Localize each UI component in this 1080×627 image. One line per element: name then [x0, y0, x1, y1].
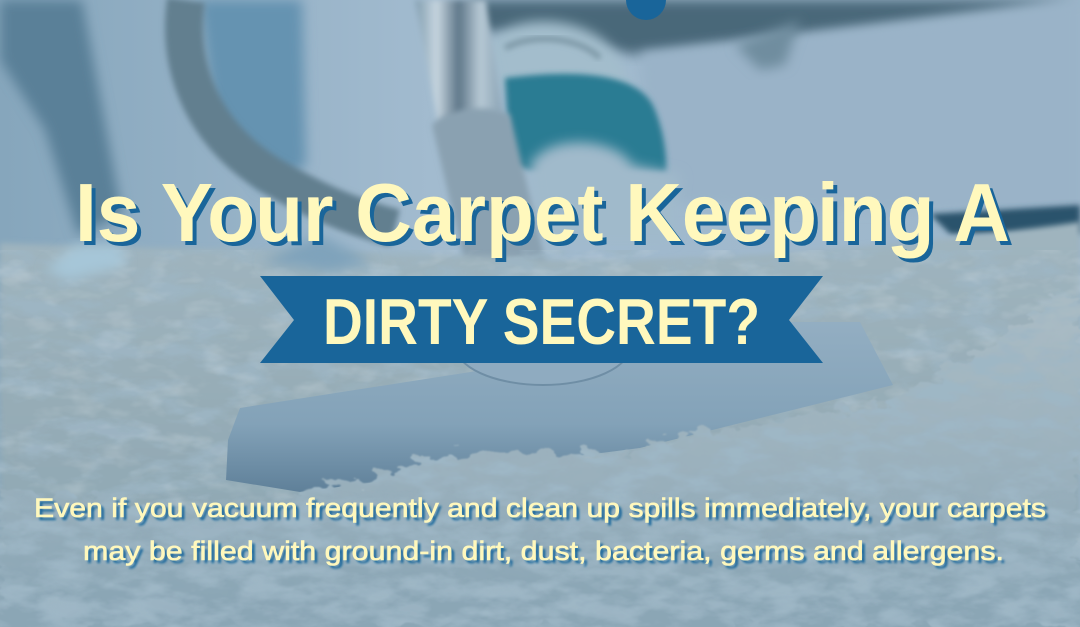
intro paragraph: [34, 493, 1049, 569]
vacuum side vent: [735, 20, 800, 70]
chrome tube: [415, 0, 502, 122]
carpet mottling: [0, 250, 1080, 627]
nozzle round joint: [455, 305, 631, 385]
carpet floor: [0, 222, 1080, 627]
person's left leg: [0, 0, 122, 235]
banner text: DIRTY SECRET?: [323, 285, 760, 358]
blue dot at top: [626, 0, 666, 20]
intro paragraph: may be filled with ground-in dirt, dust, bacteria, germs and allergens.: [86, 539, 1007, 569]
vacuum hose: [184, 0, 395, 228]
intro paragraph: Even if you vacuum frequently and clean up spills immediately, your carpets: [37, 496, 1049, 526]
teal canister: [505, 74, 666, 172]
dark machine top: [470, 0, 1080, 55]
dark shadow under body: [930, 205, 1080, 234]
vacuum nozzle head: [226, 322, 893, 492]
person's feet: [45, 245, 125, 280]
canister base: [530, 142, 680, 240]
tube neck: [432, 108, 550, 285]
intro paragraph: Even if you vacuum frequently and clean up spills immediately, your carpets: [34, 493, 1046, 523]
foreground shag carpet: [0, 290, 1080, 627]
intro paragraph: may be filled with ground-in dirt, dust, bacteria, germs and allergens.: [83, 536, 1004, 566]
main vacuum body: [640, 0, 1080, 222]
title: Is Your Carpet Keeping A: [75, 166, 1010, 259]
person's right leg: [200, 0, 306, 190]
foreground carpet base: [0, 560, 1080, 627]
ribbon banner: [260, 276, 823, 363]
vacuum white handle: [490, 21, 630, 90]
foreground carpet shadow texture: [2, 524, 1080, 627]
title: Is Your Carpet Keeping A: [79, 170, 1014, 263]
